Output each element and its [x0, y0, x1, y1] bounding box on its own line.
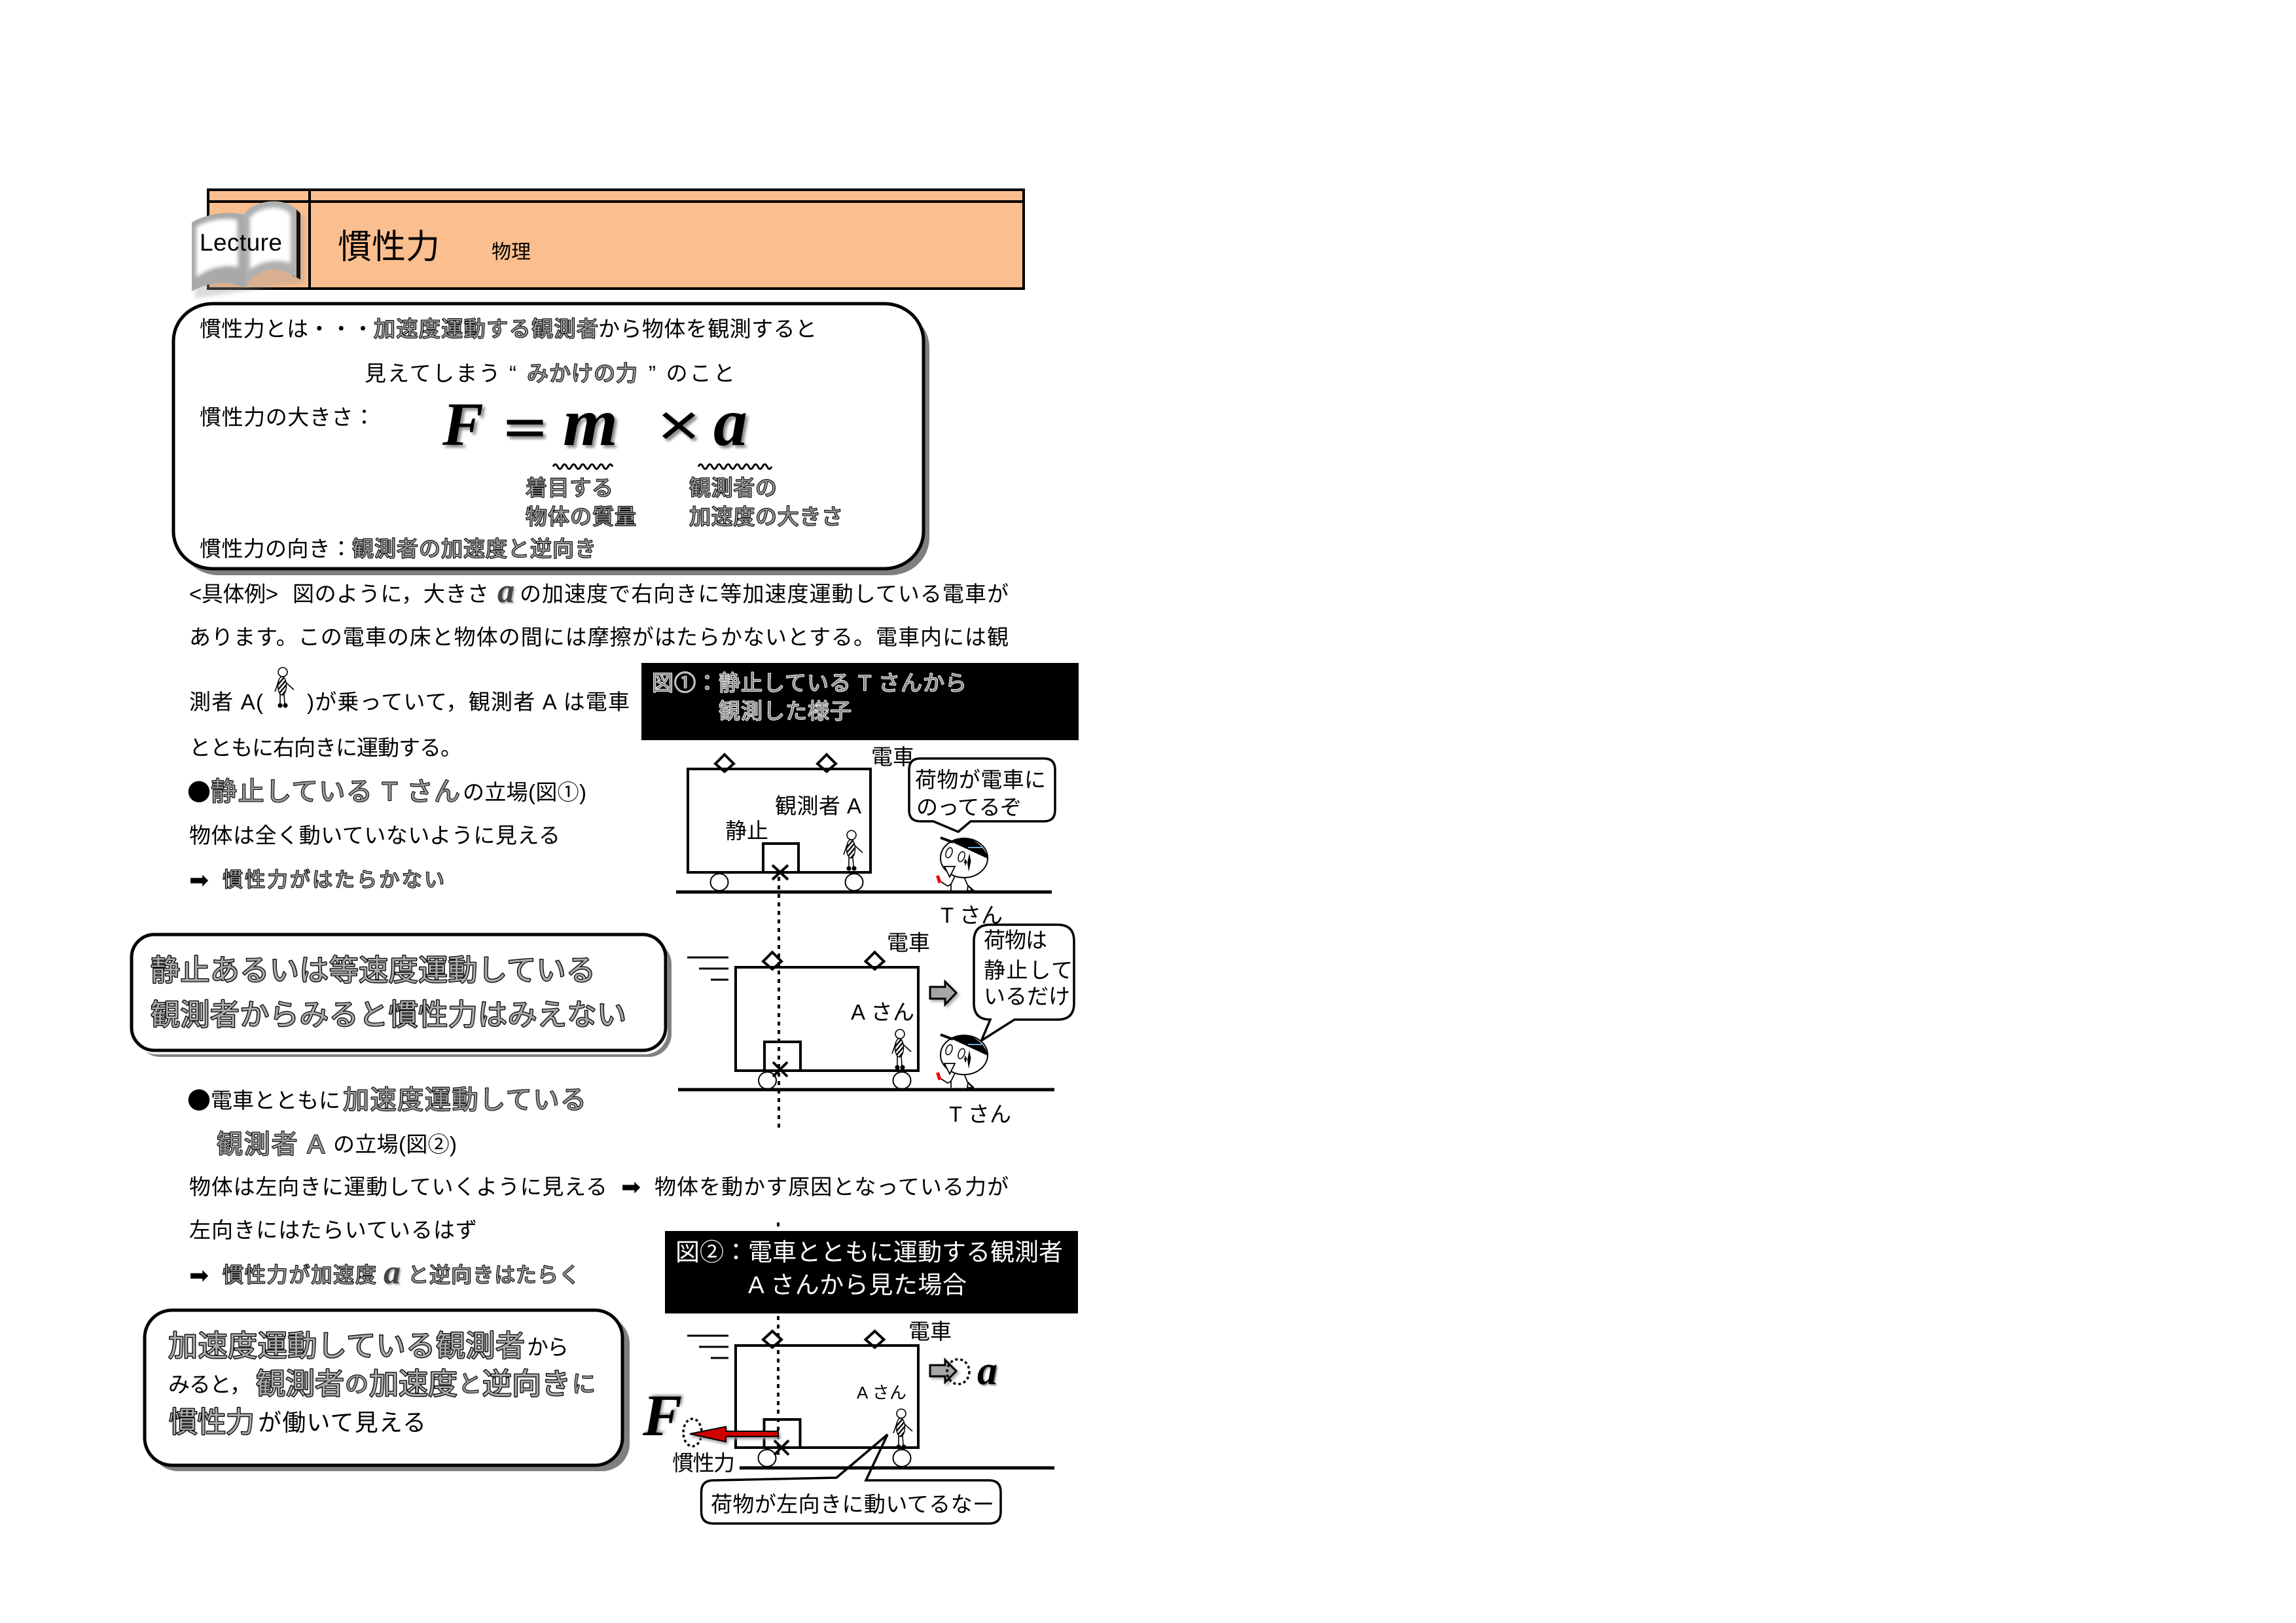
inline symbol a: a	[497, 573, 514, 610]
ground line	[676, 890, 1052, 894]
text block: concrete example: あります。この電車の床と物体の間には摩擦がはたらかないとする。電車内には観	[189, 625, 1009, 649]
symbol F: F	[642, 1383, 682, 1448]
text block: stationary T-san: 静止している T さん	[211, 777, 460, 806]
definition line 1: 加速度運動する観測者	[374, 317, 598, 341]
text block: accelerating observer A: 加速度運動している	[343, 1086, 586, 1115]
text block: concrete example: 図のように，大きさ	[293, 582, 489, 606]
definition line 2	[365, 361, 735, 385]
A-san label: A さん	[851, 1000, 914, 1024]
magnitude label: 慣性力の大きさ：	[200, 405, 375, 429]
formula F = m x a: ×	[657, 392, 700, 459]
T-san label: T さん	[949, 1102, 1011, 1126]
arrow glyph: ➡	[621, 1174, 641, 1201]
formula F = m x a: F	[442, 391, 484, 459]
text block: accelerating observer A: 物体を動かす原因となっている力が	[655, 1175, 1009, 1199]
cargo box	[764, 1419, 800, 1455]
text block: accelerating observer A: と逆向きはたらく	[408, 1263, 580, 1287]
definition line 1	[200, 317, 817, 341]
panel: definition of inertial force	[173, 304, 929, 575]
definition line 2: みかけの力	[527, 361, 637, 385]
formula F = m x a	[442, 385, 747, 460]
train at rest	[688, 755, 870, 891]
panel: figure 2 accelerating observer	[642, 1222, 1078, 1524]
formula F = m x a: a	[713, 385, 747, 460]
annotation: acceleration: 加速度の大きさ	[689, 505, 843, 529]
arrow glyph: ➡	[189, 1262, 209, 1289]
annotation: acceleration: 観測者の	[689, 476, 777, 500]
annotation: mass: 着目する	[526, 476, 613, 500]
icon: open book	[192, 202, 304, 298]
text block: concrete example	[189, 573, 1009, 760]
definition line 1: 慣性力とは・・・	[200, 317, 374, 341]
direction line: 観測者の加速度と逆向き	[352, 537, 596, 561]
text block: accelerating observer A: 物体は左向きに運動していくように見える	[189, 1175, 607, 1199]
train label: 電車	[871, 745, 914, 769]
figure 1 heading	[641, 663, 1079, 740]
text block: accelerating observer A: 電車とともに	[211, 1088, 340, 1113]
panel: callout no inertial force	[132, 935, 672, 1057]
cargo box	[763, 844, 798, 880]
definition line 2: ” のこと	[649, 361, 735, 385]
definition line 2: 見えてしまう “	[365, 361, 516, 385]
speech bubble	[909, 758, 1055, 832]
arrow glyph: ➡	[189, 867, 209, 894]
panel: callout inertial force appears: 逆向き	[482, 1367, 571, 1400]
panel: callout inertial force appears: 加速度	[369, 1367, 457, 1400]
figure 1 heading: 観測した様子	[719, 699, 852, 723]
annotation: mass	[526, 476, 636, 529]
text block: accelerating observer A: 左向きにはたらいているはず	[189, 1218, 477, 1242]
text block: stationary T-san: 物体は全く動いていないように見える	[189, 823, 560, 847]
direction line: 慣性力の向き：	[200, 537, 352, 561]
wavy underlines	[553, 465, 772, 469]
icon: observer A	[275, 668, 294, 708]
text block: accelerating observer A	[187, 1082, 1009, 1291]
text block: accelerating observer A: ●	[187, 1082, 211, 1116]
panel: callout inertial force appears: 観測者	[256, 1367, 344, 1400]
text block: concrete example: 測者 A(	[189, 690, 263, 714]
dotted reference line	[777, 1222, 780, 1455]
annotation: mass: 物体の質量	[526, 505, 636, 529]
text block: accelerating observer A: 観測者 A	[217, 1130, 325, 1159]
text block: concrete example: <具体例>	[189, 582, 278, 606]
speech bubble	[974, 925, 1074, 1041]
panel: callout no inertial force: 静止あるいは等速度運動している	[151, 954, 596, 987]
symbol a: a	[977, 1349, 997, 1393]
header band	[192, 190, 1024, 298]
text block: accelerating observer A: 慣性力が加速度	[223, 1263, 376, 1287]
panel: callout inertial force appears: 慣性力	[169, 1406, 255, 1438]
text block: concrete example: の加速度で右向きに等加速度運動している電車が	[520, 582, 1009, 606]
figure 1 heading: 図①：静止している T さんから	[652, 671, 967, 695]
panel: callout inertial force appears: が働いて見える	[258, 1409, 426, 1436]
title: 慣性力	[338, 228, 440, 266]
train label: 電車	[887, 931, 930, 955]
icon: observer A	[892, 1029, 911, 1070]
figure 2 heading: 図②：電車とともに運動する観測者	[675, 1239, 1063, 1266]
T-san label: T さん	[941, 903, 1003, 927]
book label: Lecture	[200, 229, 282, 256]
panel: callout inertial force appears: から	[527, 1335, 569, 1359]
speech bubble: 荷物は	[984, 928, 1047, 952]
text block: stationary T-san: の立場(図①)	[463, 780, 586, 804]
accelerating train	[736, 1331, 918, 1467]
speech bubble: いるだけ	[984, 984, 1070, 1008]
panel: callout inertial force appears: の	[345, 1370, 368, 1397]
text block: concrete example: とともに右向きに運動する。	[189, 736, 462, 760]
panel: figure 1 train moving	[678, 925, 1074, 1126]
formula F = m x a: m	[563, 385, 618, 460]
annotation: acceleration	[689, 476, 843, 529]
definition line 1: から物体を観測すると	[598, 317, 817, 341]
direction line	[200, 537, 596, 561]
text block: stationary T-san: 慣性力がはたらかない	[223, 868, 444, 891]
character: T-san	[937, 838, 988, 891]
train label: 電車	[908, 1319, 952, 1344]
arrow: acceleration	[930, 1360, 956, 1382]
figure 2 heading	[665, 1231, 1078, 1313]
dotted reference line between train positions	[778, 877, 780, 1131]
speed lines	[687, 1336, 728, 1358]
panel: callout inertial force appears	[145, 1310, 630, 1471]
moving train	[736, 952, 918, 1089]
icon: observer A	[844, 830, 863, 871]
observer label: 観測者 A	[775, 794, 861, 818]
figure 2 heading: A さんから見た場合	[748, 1272, 967, 1298]
speech bubble: 荷物が電車に	[915, 768, 1046, 792]
text block: concrete example: )が乗っていて，観測者 A は電車	[307, 690, 630, 714]
subject label: 物理	[492, 241, 531, 263]
inline symbol a: a	[384, 1254, 401, 1291]
cargo box	[764, 1042, 800, 1077]
text block: stationary T-san: ●	[187, 774, 211, 808]
arrow: direction of motion	[930, 982, 956, 1005]
character: T-san	[937, 1035, 988, 1088]
speech callout	[702, 1435, 1001, 1524]
text block: accelerating observer A: の立場(図②)	[333, 1132, 457, 1156]
text block: stationary T-san	[187, 774, 586, 894]
arrow: inertial force	[690, 1427, 778, 1442]
dotted circle at arrow tip	[683, 1419, 702, 1446]
speech callout: 荷物が左向きに動いてるなー	[711, 1492, 994, 1516]
A-san label: A さん	[857, 1383, 906, 1402]
panel: callout inertial force appears: に	[572, 1370, 596, 1397]
speed lines	[687, 957, 728, 980]
ground line	[678, 1088, 1054, 1092]
speech bubble: 静止して	[984, 958, 1073, 982]
ground line	[740, 1466, 1054, 1470]
panel: callout inertial force appears: と	[458, 1370, 482, 1397]
panel: callout inertial force appears: 加速度運動している観測者	[168, 1329, 525, 1363]
icon: observer A	[893, 1409, 912, 1450]
dotted circle around arrow tip	[947, 1359, 969, 1384]
panel: figure 1 stationary observer	[641, 663, 1079, 927]
panel: callout inertial force appears: みると，	[168, 1372, 251, 1397]
speech bubble: のってるぞ	[916, 795, 1022, 819]
rest label: 静止	[725, 819, 768, 843]
panel: callout no inertial force: 観測者からみると慣性力はみえない	[151, 998, 626, 1031]
inertial force label: 慣性力	[672, 1451, 735, 1475]
formula F = m x a: =	[504, 403, 546, 452]
